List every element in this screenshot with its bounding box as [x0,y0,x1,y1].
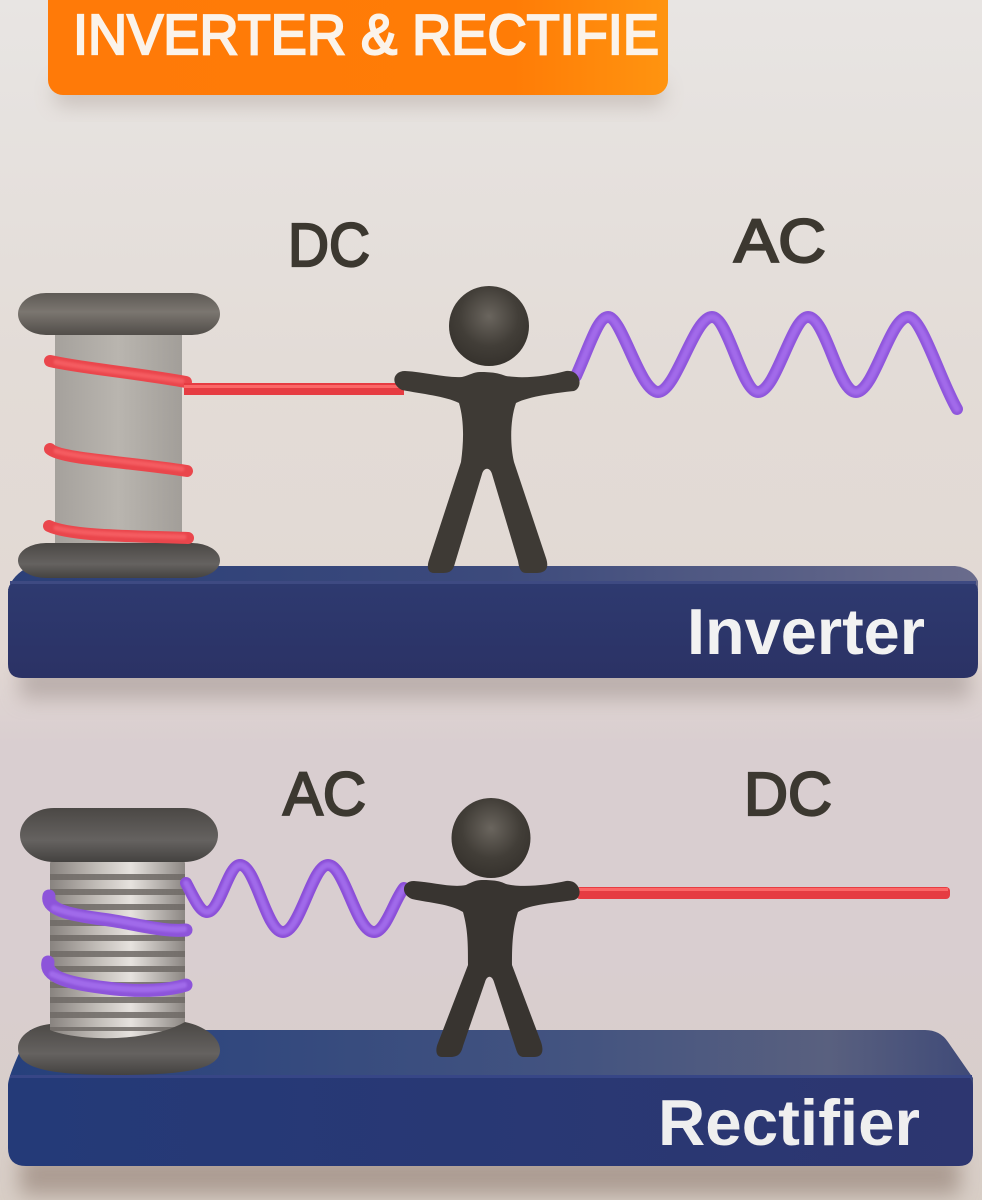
label: AC input: AC [283,760,366,828]
icon: spool with purple AC coil [18,808,220,1075]
panel: title banner [48,0,668,106]
shelf: rectifier [8,1030,973,1195]
label: DC output: DC [744,760,832,828]
wire: straight red DC line [576,887,950,899]
shelf: inverter [8,566,978,699]
icon: spool with red DC coil [18,293,220,578]
figure: person holding wires [404,798,580,1057]
label: DC input: DC [288,211,370,279]
figure: person holding wires [394,286,580,573]
label: AC output: AC [734,207,826,275]
label: Inverter: Inverter [687,595,925,668]
panel: rectifier scene [8,760,973,1195]
wave: purple AC input [186,865,404,932]
panel: inverter scene [8,207,978,699]
wire: straight red DC line [184,383,404,395]
wave: purple AC output [576,317,957,409]
heading: title text: INVERTER & RECTIFIE [73,3,659,67]
label: Rectifier: Rectifier [658,1086,920,1159]
